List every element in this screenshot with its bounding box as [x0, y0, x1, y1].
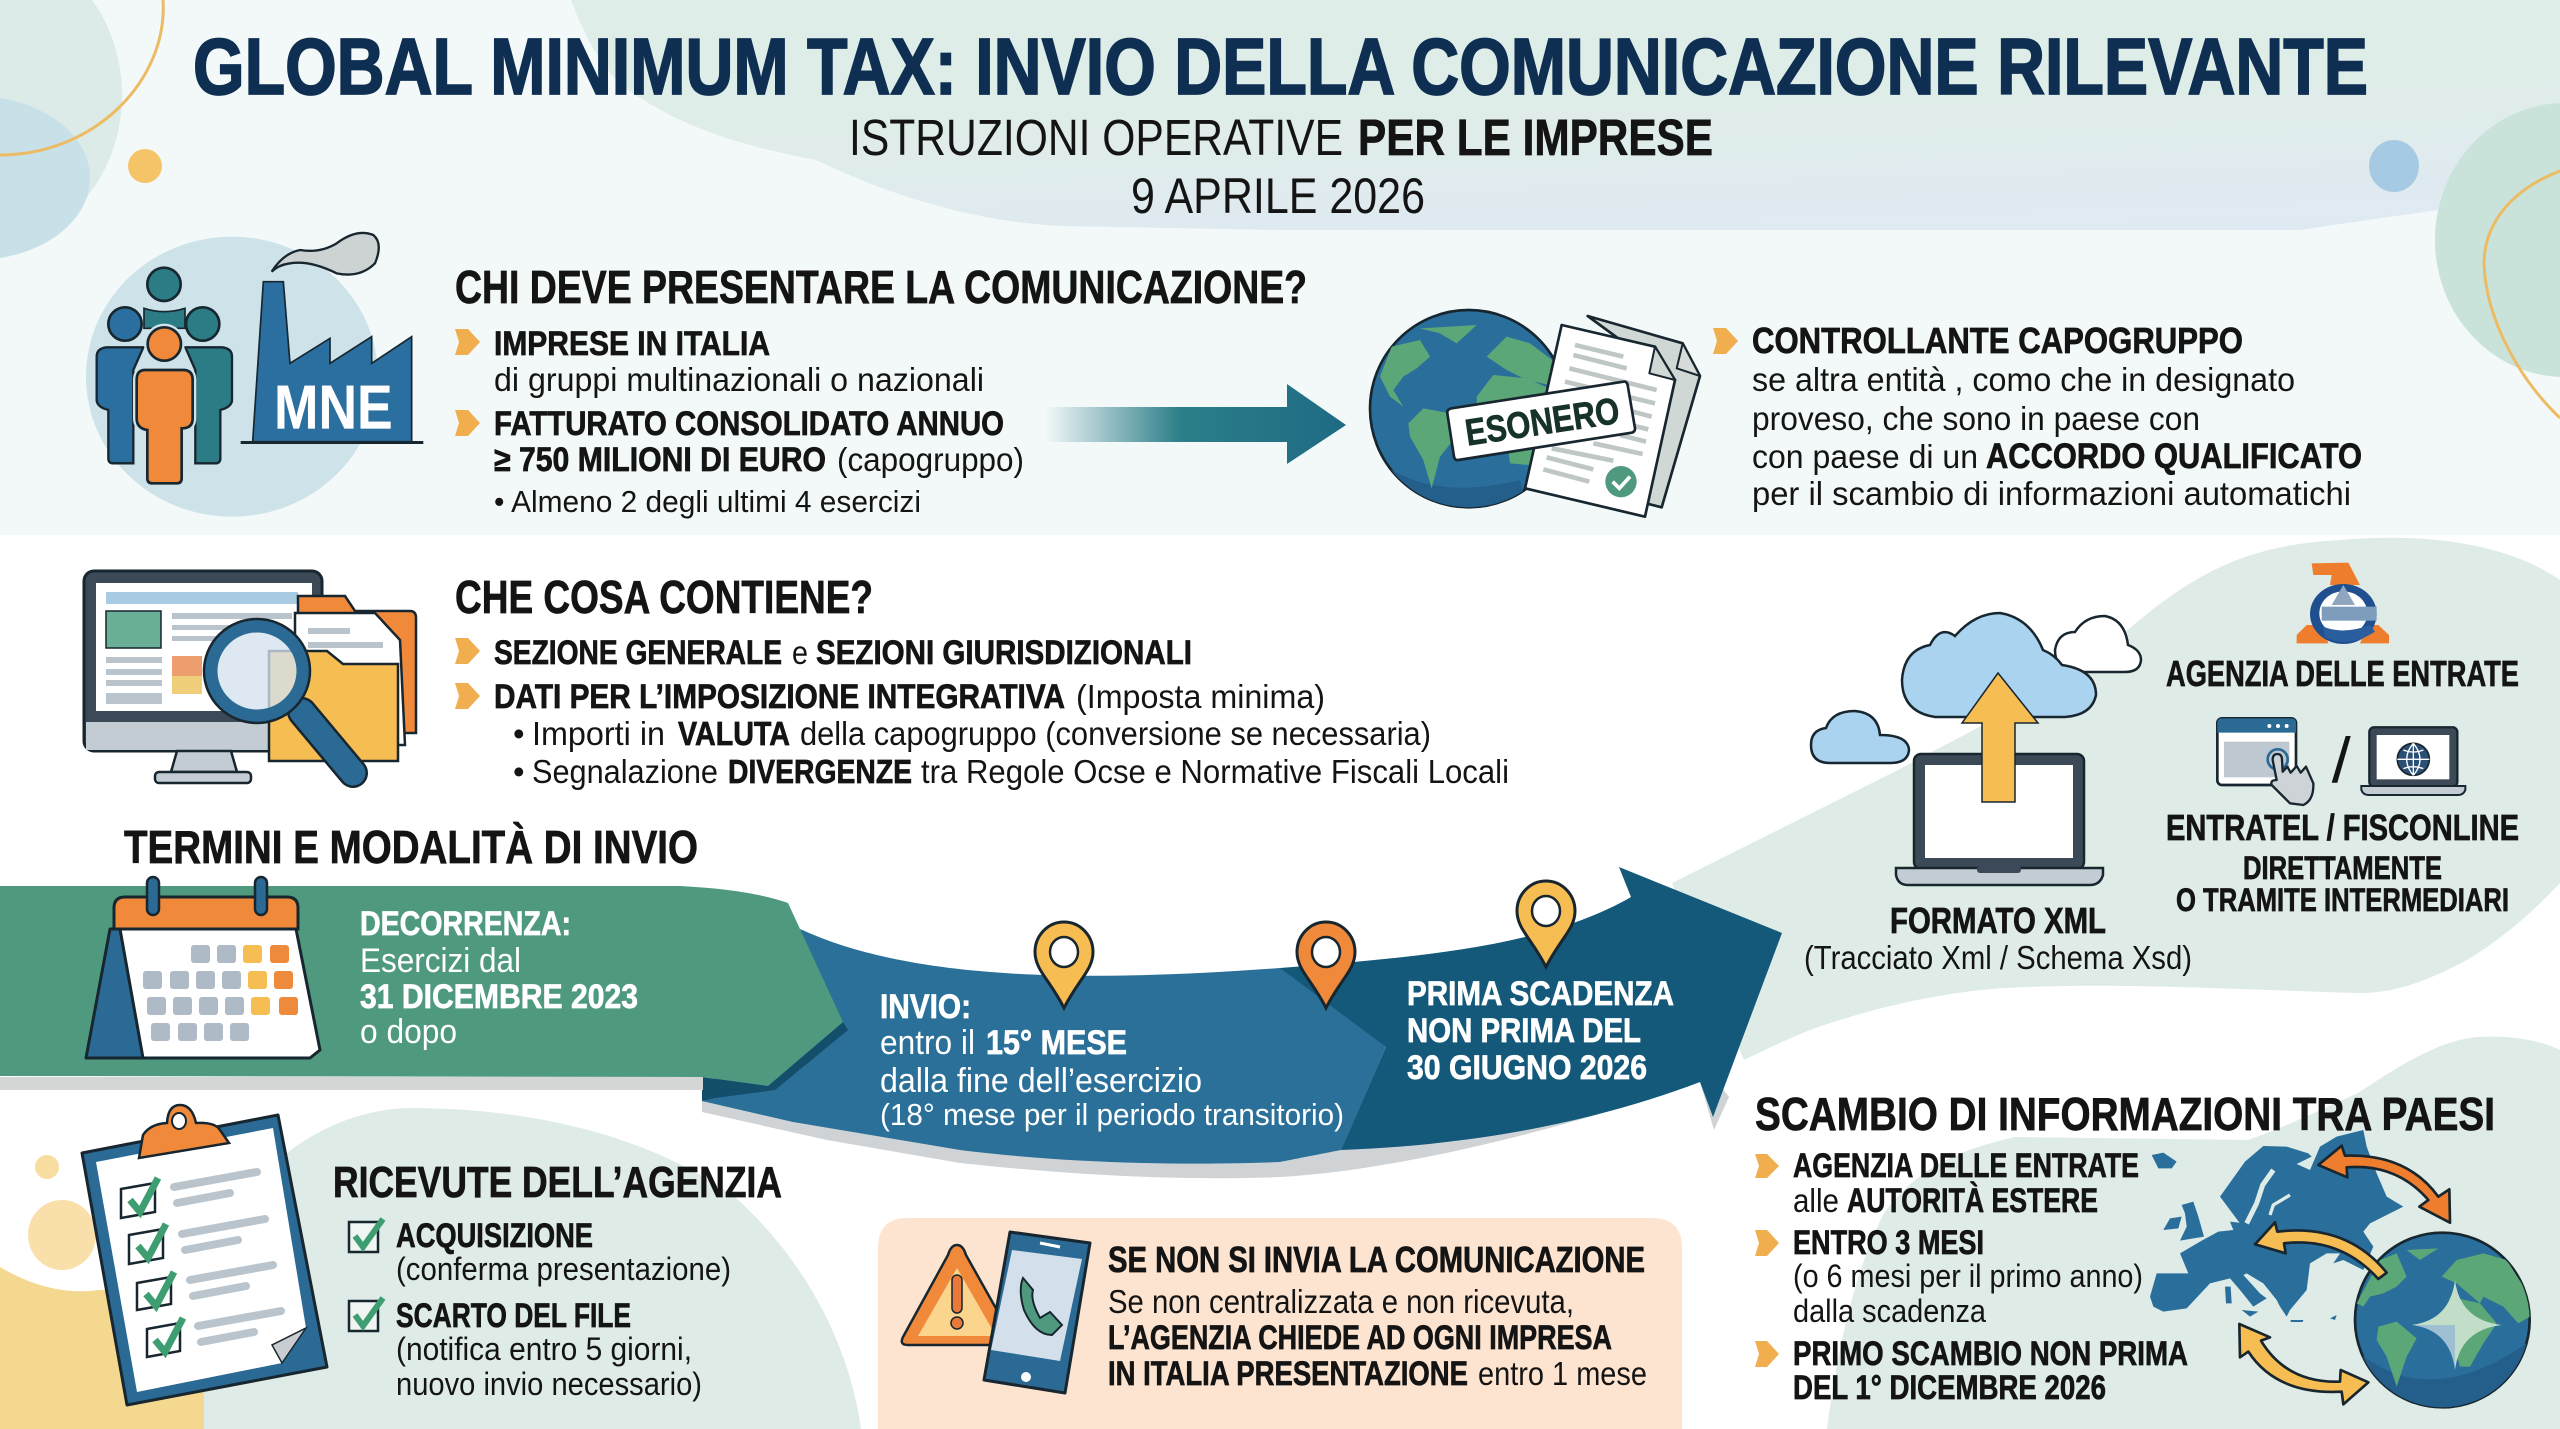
item: fatturato: FATTURATO CONSOLIDATO ANNUO: [494, 405, 1004, 443]
panel: exemption text: [1713, 320, 2362, 512]
icon: Agenzia delle Entrate logo: [2297, 563, 2389, 644]
text block: formato xml: FORMATO XML: [1890, 900, 2106, 941]
item: fatturato: ≥ 750 MILIONI DI EURO: [494, 441, 826, 479]
item: dati: [494, 678, 1509, 790]
text block: controllante capogruppo: per il scambio di informazioni automatichi: [1752, 475, 2351, 512]
item: dati: Segnalazione: [532, 753, 718, 790]
icon: yellow pin final: [1517, 881, 1575, 967]
item: dati: Importi in: [532, 715, 665, 752]
icon: globe with exemption documents: [1360, 310, 1700, 533]
icon: monitor, folders and magnifier: [84, 571, 416, 783]
item: agenzia: AGENZIA DELLE ENTRATE: [1793, 1147, 2139, 1185]
text block: controllante capogruppo: se altra entità , como che in designato: [1752, 361, 2295, 398]
text block: prima scadenza: NON PRIMA DEL: [1407, 1012, 1641, 1050]
icon: yellow pin: [1035, 922, 1093, 1008]
text: scarto del file: SCARTO DEL FILE: [396, 1297, 631, 1335]
bullet arrow: [1713, 328, 1738, 354]
icon: warning triangle: [902, 1245, 1013, 1345]
item: dati: (Imposta minima): [1076, 678, 1325, 715]
item: imprese: [494, 325, 984, 398]
item: dati: DATI PER L’IMPOSIZIONE INTEGRATIVA: [494, 678, 1065, 716]
item: entro 3 mesi: dalla scadenza: [1793, 1293, 1986, 1329]
icon: small globe: [2355, 1233, 2533, 1417]
text block: channels: [2166, 807, 2519, 918]
item: sezioni: SEZIONE GENERALE: [494, 634, 782, 672]
bullet arrow: [1755, 1341, 1779, 1367]
heading: CHI DEVE PRESENTARE LA COMUNICAZIONE?: [455, 261, 1307, 313]
item: entro 3 mesi: [1793, 1224, 2143, 1329]
item: agenzia: [1793, 1147, 2139, 1220]
item: fatturato: (capogruppo): [837, 441, 1024, 478]
text block: invio: [880, 988, 1344, 1132]
item: sezioni: [494, 634, 1192, 672]
icon: yellow double arrow: [2239, 1324, 2368, 1404]
text: acquisizione: ACQUISIZIONE: [396, 1217, 593, 1255]
text block: warning: L’AGENZIA CHIEDE AD OGNI IMPRESA: [1108, 1319, 1612, 1357]
text block: decorrenza: 31 DICEMBRE 2023: [360, 978, 638, 1016]
heading: CHE COSA CONTIENE?: [455, 571, 873, 623]
item: dati: tra Regole Ocse e Normative Fiscali Locali: [921, 753, 1509, 790]
item: imprese: di gruppi multinazionali o nazionali: [494, 361, 984, 398]
text block: formato xml: (Tracciato Xml / Schema Xsd): [1804, 939, 2192, 976]
text: acquisizione: [396, 1217, 731, 1287]
arrow to exemption: [1045, 384, 1346, 464]
text block: invio: (18° mese per il periodo transitorio): [880, 1097, 1344, 1132]
heading: terms: TERMINI E MODALITÀ DI INVIO: [124, 821, 698, 873]
text block: warning: [1108, 1239, 1647, 1393]
arrow shadow: [702, 1060, 1729, 1178]
item: sezioni: SEZIONI GIURISDIZIONALI: [816, 634, 1192, 672]
text block: decorrenza: o dopo: [360, 1013, 457, 1051]
text block: warning: IN ITALIA PRESENTAZIONE: [1108, 1355, 1468, 1393]
panel: who must file: [455, 261, 1307, 519]
text block: formato xml: [1804, 900, 2192, 976]
icon: phone: [984, 1232, 1090, 1393]
item: entro 3 mesi: ENTRO 3 MESI: [1793, 1224, 1984, 1262]
text block: invio: entro il: [880, 1024, 975, 1062]
bullet arrow: [1755, 1230, 1779, 1256]
item: imprese: IMPRESE IN ITALIA: [494, 325, 770, 363]
text block: decorrenza: DECORRENZA:: [360, 905, 571, 943]
text block: warning: SE NON SI INVIA LA COMUNICAZIONE: [1108, 1239, 1645, 1280]
item: dati: VALUTA: [678, 715, 790, 752]
icon: multinational group and factory: MNE: [274, 373, 393, 442]
text block: controllante capogruppo: ACCORDO QUALIFICATO: [1986, 437, 2362, 476]
icon: orange exchange arrow: [2318, 1146, 2450, 1223]
text block: controllante capogruppo: [1752, 320, 2362, 512]
text block: decorrenza: Esercizi dal: [360, 942, 521, 980]
icon: globe with exemption documents: ESONERO: [1462, 389, 1622, 454]
text: acquisizione: (conferma presentazione): [396, 1251, 731, 1287]
timeline arrow: [0, 867, 1782, 1178]
subtitle: ISTRUZIONI OPERATIVE: [849, 109, 1343, 166]
arrow segment: prima scadenza: [1280, 867, 1782, 1150]
arrow segment: decorrenza: [0, 886, 843, 1086]
slash between icons: [2332, 736, 2351, 783]
icon: laptop with globe: [2361, 727, 2465, 795]
text block: channels: DIRETTAMENTE: [2243, 850, 2442, 886]
item: dati: della capogruppo (conversione se necessaria): [800, 715, 1431, 752]
icon: orange pin: [1297, 922, 1355, 1008]
subtitle: [849, 109, 1713, 166]
text block: prima scadenza: 30 GIUGNO 2026: [1407, 1049, 1647, 1087]
text block: invio: 15° MESE: [986, 1024, 1127, 1062]
panel: receipts: [333, 1158, 782, 1402]
bullet arrow: [455, 638, 480, 664]
text block: controllante capogruppo: con paese di un: [1752, 438, 1978, 475]
item: fatturato: • Almeno 2 degli ultimi 4 esercizi: [494, 484, 921, 519]
heading: RICEVUTE DELL’AGENZIA: [333, 1158, 782, 1207]
text block: controllante capogruppo: proveso, che sono in paese con: [1752, 400, 2200, 437]
date: 9 APRILE 2026: [1131, 168, 1425, 224]
text: scarto del file: [396, 1297, 702, 1402]
text: scarto del file: nuovo invio necessario): [396, 1366, 702, 1402]
arrow segment: invio: [702, 929, 1386, 1164]
bullet arrow: [455, 410, 480, 436]
text block: warning: entro 1 mese: [1478, 1355, 1647, 1392]
item: dati: •: [513, 715, 525, 752]
icon: clipboard checklist: [82, 1105, 327, 1405]
text block: invio: INVIO:: [880, 988, 971, 1026]
bullet arrow: [1755, 1154, 1779, 1178]
bullet arrow: [455, 683, 480, 709]
icon: browser with hand: [2217, 718, 2313, 805]
item: primo scambio: [1793, 1335, 2188, 1407]
icon: yellow exchange arrow: [2255, 1222, 2387, 1279]
item: sezioni: e: [792, 634, 808, 671]
item: primo scambio: DEL 1° DICEMBRE 2026: [1793, 1369, 2106, 1407]
panel: contents: [455, 571, 1509, 790]
item: dati: •: [513, 753, 525, 790]
panel: information exchange: [1755, 1088, 2495, 1407]
text block: prima scadenza: PRIMA SCADENZA: [1407, 975, 1674, 1013]
text block: invio: dalla fine dell’esercizio: [880, 1062, 1202, 1100]
panel: if not sent: [878, 1218, 1682, 1429]
bullet arrow: [455, 329, 480, 355]
item: dati: DIVERGENZE: [728, 753, 912, 790]
item: fatturato: [494, 405, 1024, 519]
icon: Europe map: [2150, 1130, 2403, 1322]
item: entro 3 mesi: (o 6 mesi per il primo anno): [1793, 1258, 2143, 1294]
text: scarto del file: (notifica entro 5 giorni,: [396, 1331, 692, 1367]
text block: prima scadenza: [1407, 975, 1674, 1087]
item: agenzia: AUTORITÀ ESTERE: [1847, 1182, 2098, 1220]
text block: decorrenza: [360, 905, 638, 1051]
icon: check scarto: [349, 1298, 383, 1331]
item: primo scambio: PRIMO SCAMBIO NON PRIMA: [1793, 1335, 2188, 1373]
icon: clouds, laptop and upload arrow: [1811, 613, 2141, 885]
icon: check acquisizione: [349, 1219, 383, 1252]
text block: warning: Se non centralizzata e non ricevuta,: [1108, 1283, 1574, 1320]
text block: controllante capogruppo: CONTROLLANTE CAPOGRUPPO: [1752, 320, 2243, 361]
icon: multinational group and factory: [86, 233, 423, 517]
icon: calendar: [86, 877, 320, 1058]
subtitle: PER LE IMPRESE: [1358, 109, 1713, 166]
item: agenzia: alle: [1793, 1182, 1839, 1219]
